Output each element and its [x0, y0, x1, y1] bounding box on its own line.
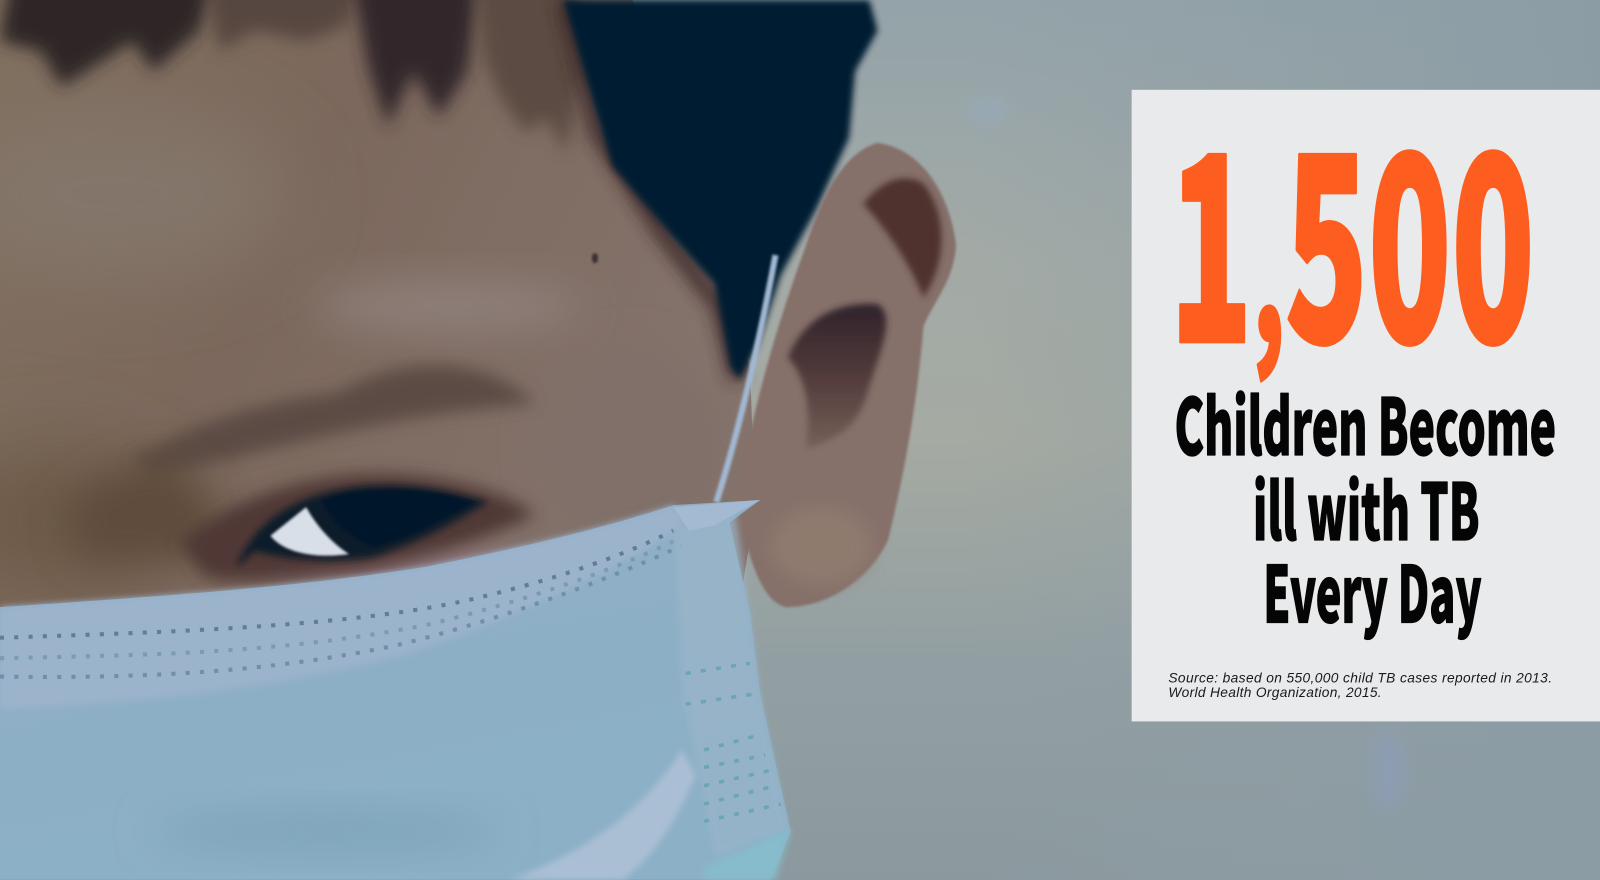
mole	[592, 253, 598, 263]
photo: child's face	[0, 0, 755, 633]
skin under eye	[255, 544, 602, 589]
stat panel	[1132, 44, 1600, 721]
mask loop tab	[673, 500, 760, 531]
headline	[1174, 366, 1556, 645]
eye white	[270, 507, 349, 556]
photo: eye	[179, 474, 536, 581]
mask right pleats	[673, 510, 788, 857]
mask lower fold	[510, 750, 696, 880]
photo: ear	[737, 143, 956, 607]
photo: mask ear loop	[716, 255, 776, 502]
photo: surgical mask	[0, 500, 791, 880]
mask top band	[0, 505, 684, 709]
mask stitched dots	[0, 531, 682, 677]
photo: eyebrow	[61, 365, 536, 561]
mask soft shadow	[153, 811, 500, 852]
hairline shadow	[563, 0, 737, 380]
source note: World Health Organization, 2015.	[1168, 685, 1382, 700]
photo: hair	[0, 0, 878, 380]
source note: Source: based on 550,000 child TB cases reported in 2013.	[1168, 671, 1552, 686]
source note	[1168, 671, 1552, 700]
